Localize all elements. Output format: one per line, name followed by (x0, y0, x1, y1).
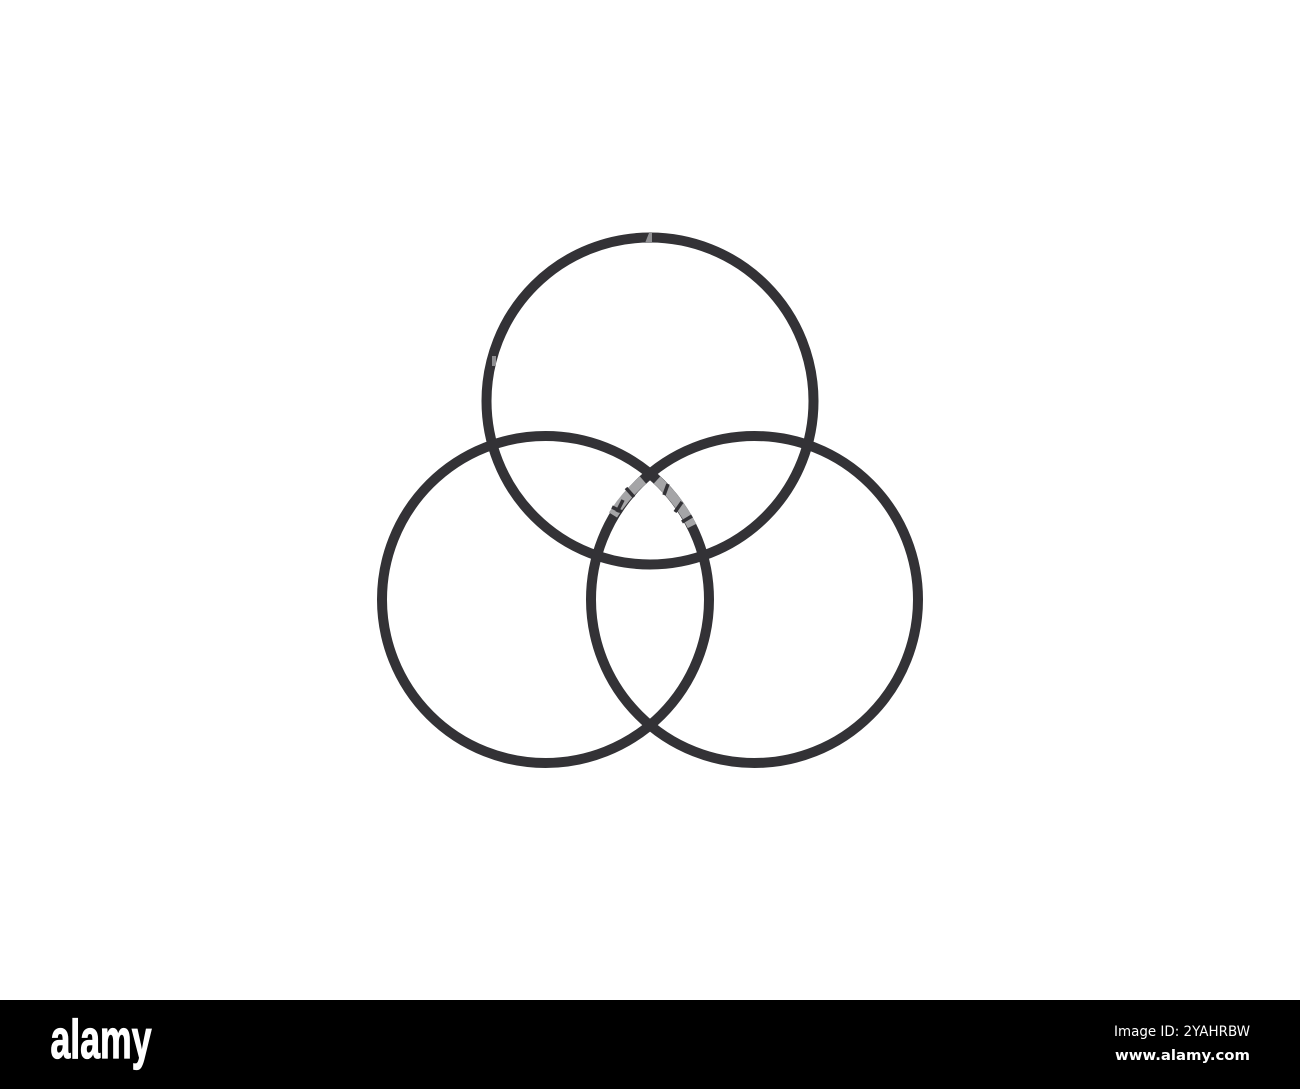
circle: bottom right (591, 436, 918, 763)
Venn diagram: three overlapping circles (382, 238, 918, 763)
faint watermark on the top circle (492, 233, 652, 366)
image id: Image ID: 2YAHRBW (1114, 1024, 1250, 1040)
watermark mark on left of circle (492, 356, 496, 366)
watermark artefacts on circle strokes (613, 480, 692, 526)
watermark on right circle arc (613, 480, 643, 515)
watermark on left circle arc (657, 480, 692, 526)
dark marks inside the watermark (612, 484, 692, 522)
watermark dark strokes (612, 484, 692, 522)
footer band (0, 1000, 1300, 1089)
watermark mark at top of circle (645, 233, 652, 243)
circle: top (486, 238, 814, 564)
logo: alamy: alamy (50, 1008, 152, 1070)
website: www.alamy.com (1115, 1048, 1250, 1064)
circle: bottom left (382, 436, 709, 763)
